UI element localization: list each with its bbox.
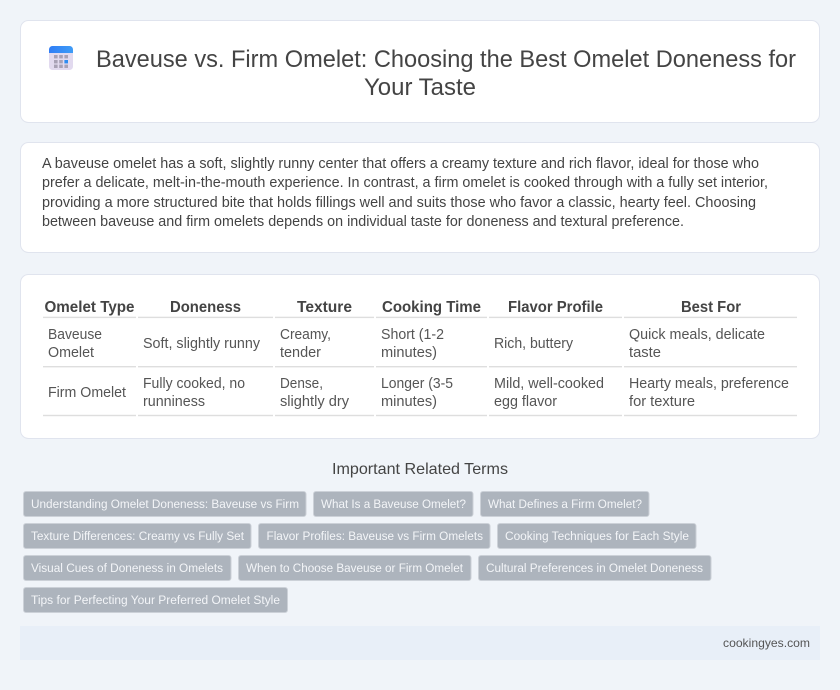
table header row: Texture — [297, 299, 352, 316]
tag: Flavor Profiles: Baveuse vs Firm Omelets — [266, 529, 483, 543]
table header row: Omelet Type — [44, 299, 135, 316]
description paragraph: A baveuse omelet has a soft, slightly runny center that offers a creamy texture and rich flavor, ideal for those who — [42, 156, 759, 172]
table row: baveuse omelet — [48, 327, 765, 361]
table row: baveuse omelet: taste — [629, 345, 661, 361]
table row: firm omelet: Fully cooked, no — [143, 376, 245, 392]
footer source text: cookingyes.com — [723, 636, 810, 650]
tag — [478, 556, 711, 580]
tag: Texture Differences: Creamy vs Fully Set — [31, 529, 245, 543]
table row: firm omelet: minutes) — [381, 394, 437, 410]
table row: baveuse omelet: Omelet — [48, 345, 94, 361]
tag — [24, 556, 231, 580]
table row: firm omelet: egg flavor — [494, 394, 557, 410]
panel: comparison table — [20, 274, 820, 438]
table row: baveuse omelet: Baveuse — [48, 327, 102, 343]
title text: Baveuse vs. Firm Omelet: Choosing the Best Omelet Doneness for — [96, 46, 796, 73]
table row: firm omelet: runniness — [143, 394, 205, 410]
description paragraph: providing a more structured bite that holds fillings well and suits those who favor a classic, hearty feel. Choosing — [42, 195, 756, 211]
tag — [314, 492, 473, 516]
tag — [24, 588, 288, 612]
description paragraph: prefer a delicate, melt-in-the-mouth experience. In contrast, a firm omelet is cooked through with a fully set interior, — [42, 175, 768, 191]
table row: firm omelet: Firm Omelet — [48, 385, 126, 401]
table row: firm omelet: Dense, — [280, 376, 323, 392]
table row: firm omelet: Longer (3-5 — [381, 376, 453, 392]
tag — [24, 492, 306, 516]
tag: When to Choose Baveuse or Firm Omelet — [246, 561, 464, 575]
title text: Your Taste — [364, 74, 476, 101]
table row: baveuse omelet: tender — [280, 345, 321, 361]
table row: baveuse omelet: Short (1-2 — [381, 327, 444, 343]
panel: title — [20, 20, 820, 122]
table header row — [44, 299, 741, 316]
tag: What Is a Baveuse Omelet? — [321, 497, 466, 511]
table header row: Flavor Profile — [508, 299, 603, 316]
tag: Tips for Perfecting Your Preferred Omelet Style — [31, 593, 280, 607]
table header row: Best For — [681, 299, 741, 316]
table row: firm omelet: Mild, well-cooked — [494, 376, 604, 392]
table row: baveuse omelet: Rich, buttery — [494, 336, 574, 352]
table row: firm omelet — [48, 376, 789, 410]
tag: Visual Cues of Doneness in Omelets — [31, 561, 223, 575]
table row: baveuse omelet: Creamy, — [280, 327, 331, 343]
tag: Cooking Techniques for Each Style — [505, 529, 689, 543]
table header row: Cooking Time — [382, 299, 481, 316]
table row: baveuse omelet: minutes) — [381, 345, 437, 361]
description paragraph: between baveuse and firm omelets depends on individual taste for doneness and textural preference. — [42, 214, 684, 230]
tag: Cultural Preferences in Omelet Doneness — [486, 561, 703, 575]
heading: related terms: Important Related Terms — [332, 461, 508, 478]
table header row: Doneness — [170, 299, 241, 316]
tag — [480, 492, 649, 516]
tag — [498, 524, 696, 548]
related term tags — [24, 492, 711, 612]
table row: baveuse omelet: Soft, slightly runny — [143, 336, 261, 352]
table row: firm omelet: slightly dry — [280, 394, 350, 410]
table row: baveuse omelet: Quick meals, delicate — [629, 327, 765, 343]
footer band — [20, 626, 820, 660]
tag — [238, 556, 471, 580]
table row: firm omelet: for texture — [629, 394, 695, 410]
table row: firm omelet: Hearty meals, preference — [629, 376, 789, 392]
tag: What Defines a Firm Omelet? — [488, 497, 642, 511]
tag — [24, 524, 251, 548]
tag — [258, 524, 490, 548]
title text — [96, 46, 796, 101]
description paragraph — [42, 156, 768, 230]
panel: description — [20, 142, 820, 252]
icon: calendar — [49, 46, 73, 70]
tag: Understanding Omelet Doneness: Baveuse vs Firm — [31, 497, 299, 511]
